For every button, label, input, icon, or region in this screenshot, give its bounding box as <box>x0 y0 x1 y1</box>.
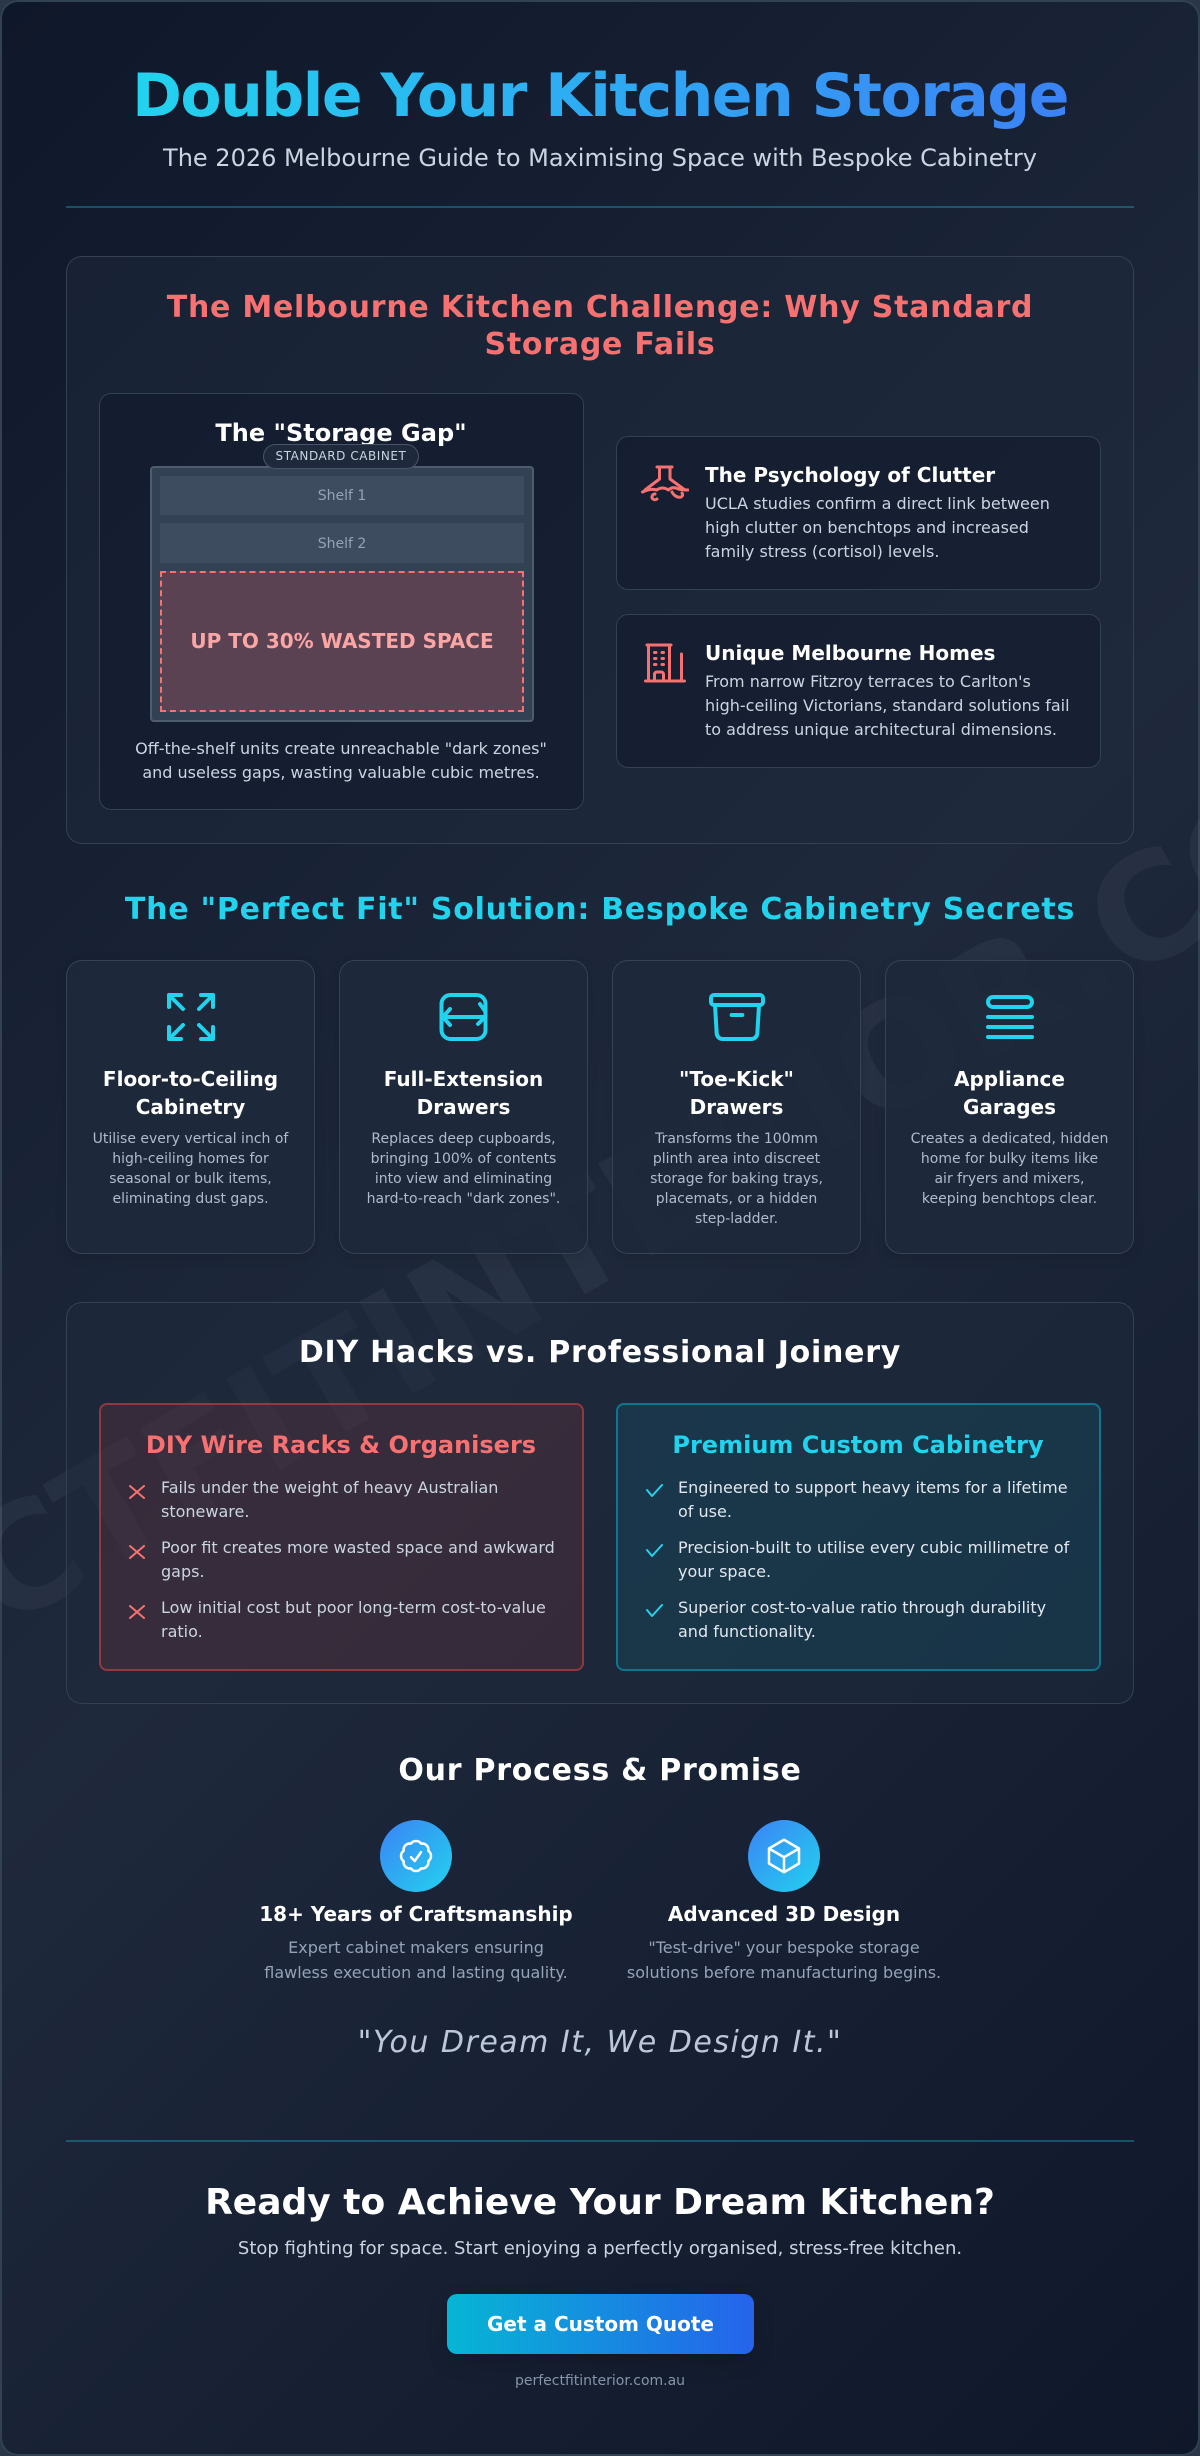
card title <box>103 1067 278 1119</box>
item text <box>678 1478 1068 1521</box>
card text: Replaces deep cupboards, <box>371 1131 556 1147</box>
card: toe-kick drawers <box>612 960 861 1254</box>
card title: Drawers <box>417 1095 510 1119</box>
item text <box>161 1538 555 1581</box>
clutter text: UCLA studies confirm a direct link between <box>705 494 1050 513</box>
card text: step-ladder. <box>695 1211 778 1227</box>
card text <box>93 1131 289 1207</box>
card title: Appliance <box>954 1067 1065 1091</box>
challenge heading: The Melbourne Kitchen Challenge: Why Standard <box>167 290 1033 325</box>
card title: Garages <box>963 1095 1056 1119</box>
clutter text: family stress (cortisol) levels. <box>705 542 939 561</box>
icon: cube <box>748 1820 820 1892</box>
item text: stoneware. <box>161 1502 249 1521</box>
solution heading: The "Perfect Fit" Solution: Bespoke Cabinetry Secrets <box>125 892 1075 927</box>
DIY item 3 <box>129 1598 546 1641</box>
card: floor-to-ceiling <box>66 960 315 1254</box>
process item: 3D design <box>627 1820 941 1982</box>
item text: of use. <box>678 1502 732 1521</box>
icon: check <box>646 1544 663 1557</box>
item text: Superior cost-to-value ratio through durability <box>678 1598 1046 1617</box>
wasted space zone: UP TO 30% WASTED SPACE <box>190 629 494 653</box>
item text: Precision-built to utilise every cubic millimetre of <box>678 1538 1069 1557</box>
CTA heading: Ready to Achieve Your Dream Kitchen? <box>205 2182 995 2223</box>
icon: cross <box>129 1485 145 1499</box>
card text: Creates a dedicated, hidden <box>911 1131 1108 1147</box>
panel: premium cabinetry <box>616 1403 1101 1671</box>
panel: storage gap <box>99 393 584 810</box>
process text <box>627 1938 941 1982</box>
icon: expand arrows <box>166 992 216 1042</box>
DIY item 1 <box>129 1478 498 1521</box>
card text: Transforms the 100mm <box>655 1131 818 1147</box>
homes title: Unique Melbourne Homes <box>705 641 995 665</box>
icon: archive box <box>709 993 765 1041</box>
standard cabinet badge <box>263 444 419 469</box>
DIY heading: DIY Wire Racks & Organisers <box>146 1431 536 1459</box>
card text <box>650 1131 823 1227</box>
item text: Fails under the weight of heavy Australian <box>161 1478 498 1497</box>
process item: craftsmanship <box>259 1820 573 1982</box>
card text: placemats, or a hidden <box>656 1191 817 1207</box>
CTA subtext: Stop fighting for space. Start enjoying a perfectly organised, stress-free kitchen. <box>238 2238 962 2259</box>
website: perfectfitinterior.com.au <box>515 2373 685 2389</box>
card text: storage for baking trays, <box>650 1171 823 1187</box>
premium item 2 <box>646 1538 1070 1581</box>
icon: check badge <box>380 1820 452 1892</box>
tagline quote: "You Dream It, We Design It." <box>358 2025 842 2060</box>
card: appliance garages <box>885 960 1134 1254</box>
item text: ratio. <box>161 1622 203 1641</box>
item text: Engineered to support heavy items for a lifetime <box>678 1478 1068 1497</box>
clutter title: The Psychology of Clutter <box>705 463 995 487</box>
premium item 3 <box>646 1598 1046 1641</box>
clutter text: high clutter on benchtops and increased <box>705 518 1029 537</box>
item text <box>678 1538 1070 1581</box>
homes text: high-ceiling Victorians, standard solutions fail <box>705 696 1070 715</box>
item text: and functionality. <box>678 1622 816 1641</box>
card: psychology of clutter <box>616 436 1101 590</box>
shelf 1 <box>160 476 524 515</box>
storage gap title: The "Storage Gap" <box>215 419 467 447</box>
icon: cross <box>129 1545 145 1559</box>
process title: Advanced 3D Design <box>668 1902 900 1926</box>
icon: cross <box>129 1605 145 1619</box>
card text: plinth area into discreet <box>653 1151 820 1167</box>
panel: DIY racks <box>99 1403 584 1671</box>
panel: the Melbourne kitchen challenge <box>66 256 1134 844</box>
card title <box>679 1067 794 1119</box>
card text: into view and eliminating <box>375 1171 552 1187</box>
card text: home for bulky items like <box>921 1151 1098 1167</box>
item text: Low initial cost but poor long-term cost-to-value <box>161 1598 546 1617</box>
process text: flawless execution and lasting quality. <box>264 1963 568 1982</box>
card text: eliminating dust gaps. <box>112 1191 269 1207</box>
process title: 18+ Years of Craftsmanship <box>259 1902 573 1926</box>
clutter text <box>705 494 1050 561</box>
card text: hard-to-reach "dark zones". <box>367 1191 560 1207</box>
challenge heading <box>166 290 1033 362</box>
item text <box>678 1598 1046 1641</box>
process text: solutions before manufacturing begins. <box>627 1963 941 1982</box>
card title: Floor-to-Ceiling <box>103 1067 278 1091</box>
card text <box>367 1131 560 1207</box>
premium item 1 <box>646 1478 1068 1521</box>
panel: DIY vs professional <box>66 1302 1134 1704</box>
card text: keeping benchtops clear. <box>922 1191 1097 1207</box>
title: Double Your Kitchen Storage <box>132 61 1068 131</box>
process text <box>264 1938 568 1982</box>
cabinet diagram <box>150 466 534 722</box>
item text: your space. <box>678 1562 771 1581</box>
icon: stacked list <box>986 995 1034 1039</box>
DIY item 2 <box>129 1538 555 1581</box>
card title: "Toe-Kick" <box>679 1067 794 1091</box>
homes text: to address unique architectural dimensions. <box>705 720 1057 739</box>
shelf 2: Shelf 2 <box>318 536 366 552</box>
CTA button: Get a Custom Quote <box>487 2312 714 2336</box>
process text: Expert cabinet makers ensuring <box>288 1938 544 1957</box>
card title: Drawers <box>690 1095 783 1119</box>
process text: "Test-drive" your bespoke storage <box>648 1938 920 1957</box>
process heading: Our Process & Promise <box>398 1753 802 1788</box>
subtitle: The 2026 Melbourne Guide to Maximising Space with Bespoke Cabinetry <box>163 144 1037 172</box>
icon: building <box>644 644 686 682</box>
item text <box>161 1598 546 1641</box>
card title: Full-Extension <box>384 1067 543 1091</box>
challenge heading: Storage Fails <box>484 327 716 362</box>
item text <box>161 1478 498 1521</box>
storage gap caption: and useless gaps, wasting valuable cubic metres. <box>142 763 540 782</box>
wasted space zone <box>160 571 524 712</box>
card text: seasonal or bulk items, <box>109 1171 272 1187</box>
shelf 1: Shelf 1 <box>318 488 366 504</box>
card text: high-ceiling homes for <box>112 1151 269 1167</box>
shelf 2 <box>160 523 524 563</box>
item text: Poor fit creates more wasted space and awkward <box>161 1538 555 1557</box>
storage gap caption <box>135 739 547 782</box>
CTA button <box>447 2294 754 2354</box>
card text: air fryers and mixers, <box>934 1171 1085 1187</box>
card text <box>911 1131 1108 1207</box>
icon: flask <box>641 466 689 502</box>
card: unique Melbourne homes <box>616 614 1101 768</box>
comparison heading: DIY Hacks vs. Professional Joinery <box>299 1335 901 1370</box>
card text: bringing 100% of contents <box>371 1151 556 1167</box>
standard cabinet badge: STANDARD CABINET <box>276 449 406 463</box>
premium heading: Premium Custom Cabinetry <box>672 1431 1044 1459</box>
icon: check <box>646 1484 663 1497</box>
card: full-extension drawers <box>339 960 588 1254</box>
card title: Cabinetry <box>136 1095 245 1119</box>
storage gap caption: Off-the-shelf units create unreachable "dark zones" <box>135 739 547 758</box>
item text: gaps. <box>161 1562 205 1581</box>
card text: Utilise every vertical inch of <box>93 1131 288 1147</box>
card title <box>384 1067 543 1119</box>
icon: check <box>646 1604 663 1617</box>
icon: drawer extension <box>440 993 488 1041</box>
homes text: From narrow Fitzroy terraces to Carlton's <box>705 672 1031 691</box>
card title <box>954 1067 1065 1119</box>
homes text <box>705 672 1070 739</box>
